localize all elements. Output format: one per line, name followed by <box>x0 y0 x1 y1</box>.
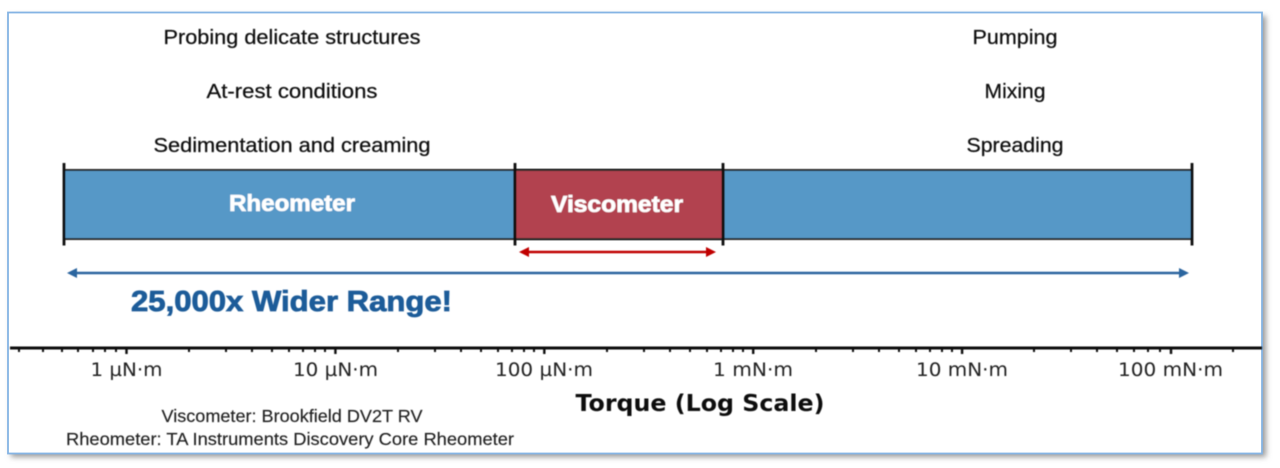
text block: high torque applications: Mixing <box>984 80 1046 103</box>
text block: low torque applications: Probing delicate structures <box>164 26 420 49</box>
axis tick labels: 10 mN·m <box>916 360 1008 381</box>
text block: instrument notes: Viscometer: Brookfield DV2T RV <box>162 406 423 426</box>
text block: instrument notes <box>66 406 514 449</box>
minor ticks <box>19 348 1233 352</box>
axis tick labels: 10 µN·m <box>293 360 378 381</box>
callout: wider range: 25,000x Wider Range! <box>131 286 452 318</box>
label: rheometer: Rheometer <box>229 190 355 216</box>
arrow: rheometer range <box>67 268 1189 278</box>
text block: low torque applications: Sedimentation and creaming <box>154 134 430 157</box>
axis tick labels: 1 µN·m <box>90 360 162 381</box>
range bar: rheometer <box>64 163 1192 246</box>
text block: instrument notes: Rheometer: TA Instruments Discovery Core Rheometer <box>66 429 514 449</box>
axis: torque log scale <box>10 348 1262 417</box>
axis tick labels: 1 mN·m <box>713 360 793 381</box>
axis tick labels: 100 µN·m <box>495 360 593 381</box>
text block: low torque applications: At-rest conditions <box>206 80 378 103</box>
range bar: viscometer <box>515 163 723 246</box>
text block: high torque applications <box>966 26 1064 157</box>
text block: high torque applications: Pumping <box>972 26 1058 49</box>
label: viscometer: Viscometer <box>551 191 683 217</box>
axis tick labels: 100 mN·m <box>1118 360 1223 381</box>
text block: low torque applications <box>154 26 430 157</box>
axis tick labels <box>90 360 1223 381</box>
axis title: Torque (Log Scale) <box>576 391 824 417</box>
text block: high torque applications: Spreading <box>966 134 1064 157</box>
major ticks <box>126 348 1171 354</box>
arrow: viscometer range <box>519 247 716 257</box>
